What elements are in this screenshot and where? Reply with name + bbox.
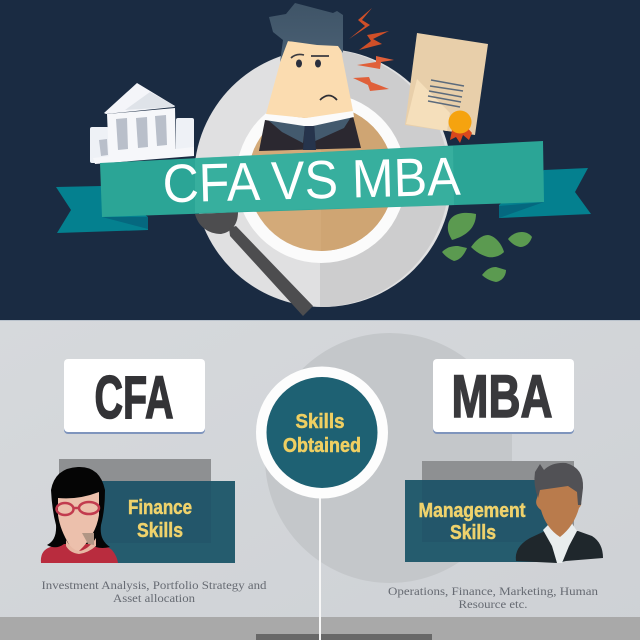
eyes and brows [291,54,329,68]
ribbon: left tail [56,186,148,233]
illustration: woman with glasses [41,467,118,563]
tie [303,121,316,150]
panel: finance skills [59,459,235,563]
illustration: businessman avatar [516,463,603,563]
title: CFA VS MBA [162,147,461,214]
hair [269,3,343,62]
ribbon: right tail [499,168,591,218]
icon: bank building [90,83,194,164]
card: CFA heading: CFA [94,364,174,431]
glasses [56,502,99,515]
icon: certificate document [405,33,488,143]
decorative top edge of lower panel [0,320,640,321]
panel: finance skills: Skills [137,520,183,542]
illustration: coffee cup plate [194,49,452,307]
seal [448,110,472,134]
caption: MBA skills [388,585,598,611]
icon: leaves [442,213,532,282]
seal ribbon [450,126,472,143]
columns [99,115,167,156]
next section bar [256,634,432,640]
certificate text lines [428,80,464,107]
badge: skills obtained [256,366,388,498]
vertical connector [319,498,321,640]
caption: CFA skills: Investment Analysis, Portfolio Strategy and [42,579,267,592]
suit [259,116,361,151]
caption: CFA skills [42,579,267,605]
background circle [265,333,512,583]
badge: skills obtained: Obtained [283,435,361,457]
panel: light lower background [0,320,640,640]
panel: finance skills: Finance [128,497,192,519]
face [266,41,353,118]
lapels [268,120,305,143]
caption: CFA skills: Asset allocation [113,592,195,605]
panel: management skills: Management [418,500,526,522]
icon: lightning bolts [349,8,394,91]
card: CFA heading [64,359,205,434]
frown [320,96,337,100]
panel: dark header background [0,0,640,320]
illustration: worried businessman [259,3,361,151]
banner highlight over plate [195,146,454,213]
icon: spoon [195,212,313,316]
badge: skills obtained: Skills [296,411,344,433]
footer strip [0,617,640,640]
caption: MBA skills: Operations, Finance, Marketing, Human [388,585,598,598]
banner: main ribbon [100,141,544,217]
panel: management skills: Skills [450,522,496,544]
card: MBA heading: MBA [452,363,552,430]
caption: MBA skills: Resource etc. [458,598,528,611]
collar [265,110,354,126]
panel: management skills [405,461,574,562]
